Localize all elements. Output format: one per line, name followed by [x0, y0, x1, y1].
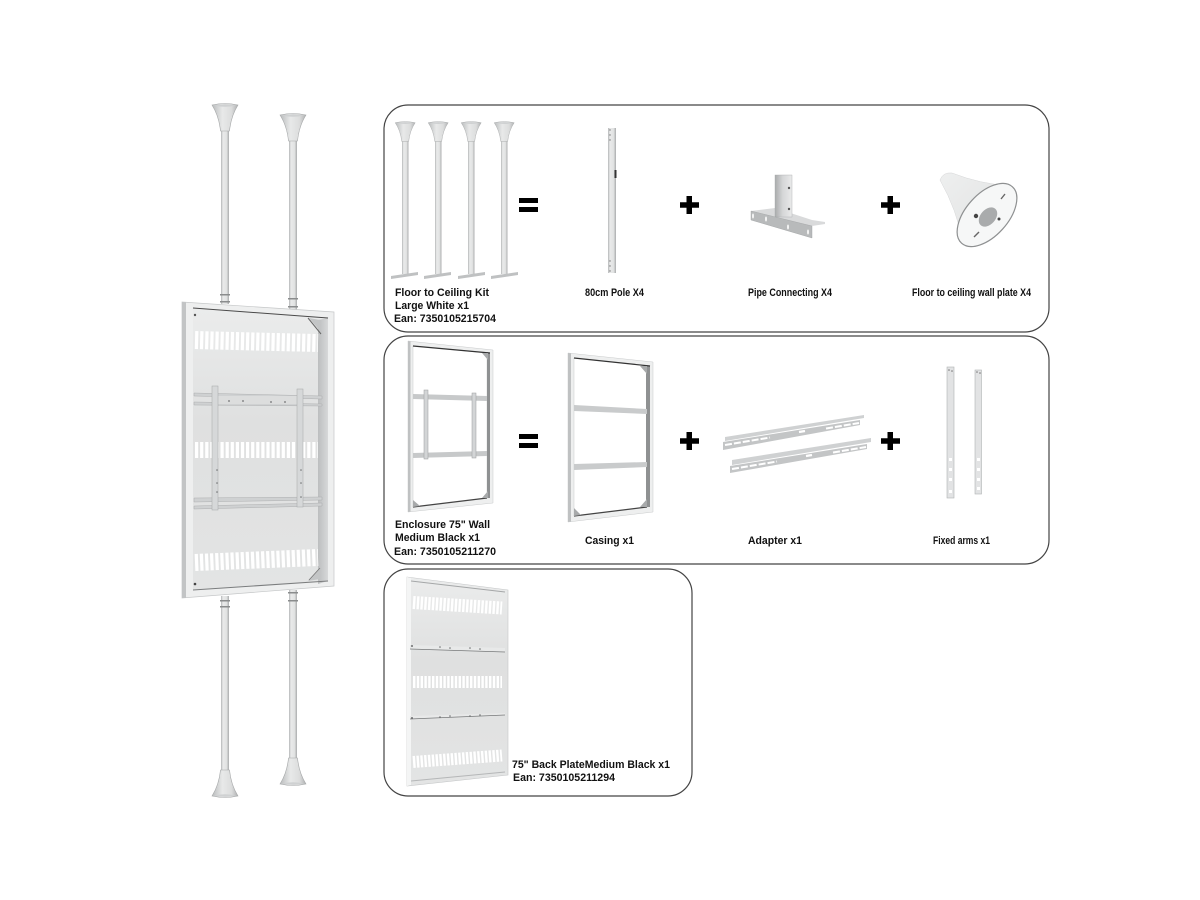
label: pipe connecting: Pipe Connecting X4	[748, 287, 833, 299]
back plate label: Ean: 7350105211294	[513, 772, 616, 784]
kit label: Floor to Ceiling Kit	[395, 287, 489, 299]
icon: adapter rails	[723, 415, 871, 473]
mounting bracket	[194, 386, 322, 510]
enclosure label: Medium Black x1	[395, 532, 480, 544]
enclosure label	[394, 519, 496, 558]
equals sign	[519, 434, 538, 448]
panel: enclosure	[384, 336, 1049, 564]
back plate image	[407, 577, 508, 786]
plus sign	[881, 196, 900, 214]
main product: assembled floor to ceiling unit	[182, 104, 334, 798]
icon: 80cm pole	[608, 128, 616, 273]
upper left pole	[212, 104, 238, 304]
enclosure image: frame with bracket	[408, 341, 493, 512]
icon: pipe connector	[751, 175, 825, 238]
ventilation slots	[195, 340, 318, 562]
plus sign	[680, 432, 699, 450]
back plate label: 75" Back PlateMedium Black x1	[512, 759, 670, 771]
label: adapter: Adapter x1	[748, 535, 802, 547]
lower left pole	[212, 596, 238, 798]
back plate label	[512, 759, 670, 784]
lower right pole	[280, 590, 306, 786]
icon: casing	[568, 353, 653, 522]
kit label	[394, 287, 497, 325]
upper right pole	[280, 114, 306, 311]
enclosure label: Enclosure 75" Wall	[395, 519, 490, 531]
plus sign	[680, 196, 699, 214]
plus sign	[881, 432, 900, 450]
kit label: Large White x1	[395, 300, 469, 312]
kit image: four poles	[391, 122, 518, 279]
label: casing: Casing x1	[585, 535, 634, 547]
label: fixed arms: Fixed arms x1	[933, 535, 990, 547]
enclosure label: Ean: 7350105211270	[394, 546, 496, 558]
kit label: Ean: 7350105215704	[394, 313, 497, 325]
equals sign	[519, 198, 538, 212]
icon: fixed arms	[947, 367, 982, 498]
enclosure frame and back plate	[182, 302, 334, 598]
label: 80cm pole: 80cm Pole X4	[585, 287, 645, 299]
panel: back plate	[384, 569, 692, 796]
icon: wall plate	[940, 173, 1028, 257]
panel: floor to ceiling kit	[384, 105, 1049, 332]
label: wall plate: Floor to ceiling wall plate X4	[912, 287, 1032, 299]
